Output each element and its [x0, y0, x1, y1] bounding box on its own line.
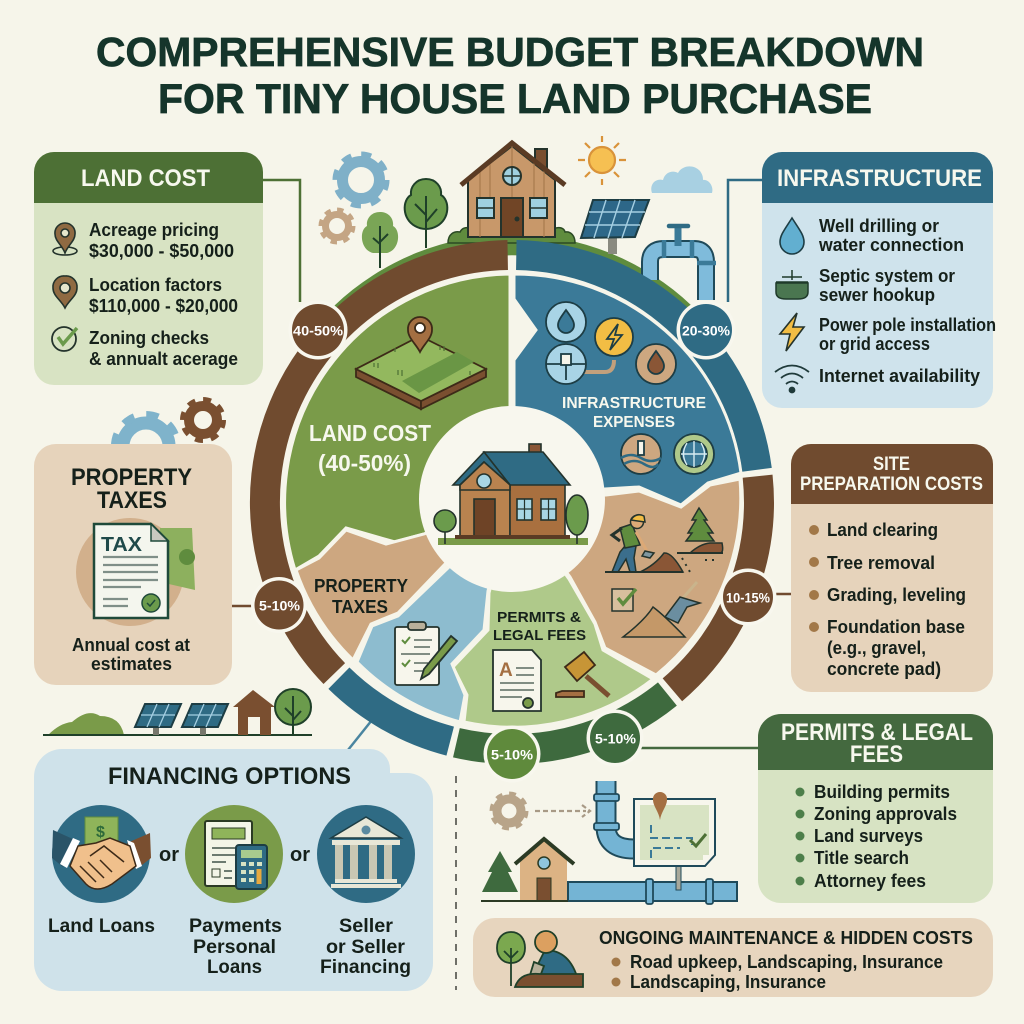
icon: check circle [52, 327, 77, 351]
heading [71, 464, 192, 514]
icon: tax document: TAX [101, 534, 143, 556]
text: seller financing: Seller [339, 916, 394, 937]
icons: infrastructure wedge [546, 302, 714, 474]
badge: 40-50% [288, 300, 348, 360]
icon: gravel pile [623, 607, 685, 637]
icon: gear [492, 794, 526, 828]
heading: INFRASTRUCTURE [777, 165, 982, 192]
text: well drilling [818, 215, 964, 255]
icon: gavel [556, 652, 609, 697]
list: maintenance items: Landscaping, Insurance [630, 971, 826, 992]
text: zoning checks: Zoning checks [89, 327, 209, 348]
text: acreage pricing [89, 219, 234, 261]
icon: tan gear [321, 210, 353, 242]
badge: 5-10% permits: 5-10% [595, 730, 637, 746]
text: location factors: Location factors [89, 274, 222, 295]
ring: site preparation [672, 476, 759, 690]
label: permits wedge: PERMITS & [497, 609, 581, 626]
text: septic: sewer hookup [819, 284, 935, 305]
icon: tree large [405, 179, 447, 248]
icon: pine tree [690, 543, 723, 553]
wedge: property taxes [296, 500, 512, 660]
icon: top scene [321, 136, 716, 326]
icon: water drop [780, 218, 804, 254]
heading: LAND COST [81, 165, 210, 192]
icon: permit document [493, 650, 541, 711]
label: land cost wedge: LAND COST [309, 420, 431, 446]
ring: land cost [265, 255, 508, 674]
icon: gardener with tree [497, 931, 583, 987]
icon: site map sign [676, 866, 681, 890]
label: property taxes wedge: TAXES [332, 597, 388, 617]
wedge: infrastructure [514, 274, 741, 505]
connector: site preparation [776, 593, 791, 595]
text: payments personal loans [189, 916, 282, 978]
icon: land loans handshake [52, 805, 151, 903]
text: payments personal loans: Personal [193, 937, 276, 958]
list: permit items: Building permits [814, 781, 950, 802]
icon: shovel [682, 582, 697, 599]
icon: land plot [356, 317, 486, 409]
label: permits wedge: LEGAL FEES [493, 627, 586, 644]
text: well drilling: water connection [818, 234, 964, 255]
icon: pin [53, 276, 77, 308]
text: location factors [89, 274, 238, 316]
text: annual cost [72, 634, 190, 674]
heading: PERMITS & LEGAL [781, 719, 973, 746]
icon: water pipe [650, 226, 716, 300]
icon: horizontal pipe [568, 882, 737, 901]
badge: 20-30% [676, 300, 736, 360]
icon: green hill [334, 234, 692, 326]
icon: solar panel [581, 200, 649, 254]
icon: pipe and site map illustration [481, 781, 737, 904]
list: site preparation items: Land clearing [827, 519, 938, 540]
arrow: dashed [535, 805, 590, 817]
panel: infrastructure [762, 152, 996, 408]
icon: checkbox [612, 589, 633, 611]
chart: inner wedges [285, 274, 741, 727]
heading: FEES [850, 741, 903, 768]
label: land cost wedge [309, 420, 431, 476]
badge: 20-30%: 20-30% [682, 322, 731, 338]
icon: bush around house [448, 228, 575, 243]
list: permit items: Zoning approvals [814, 803, 957, 824]
list: site preparation items [809, 519, 966, 679]
list: maintenance items: Road upkeep, Landscaping, Insurance [630, 951, 943, 972]
panel: ongoing maintenance [473, 918, 993, 997]
center hole [419, 406, 605, 592]
list: site preparation items: (e.g., gravel, [827, 637, 926, 658]
text: payments personal loans: Loans [207, 957, 262, 978]
panel: financing options [34, 749, 433, 991]
panel: land cost [34, 152, 263, 385]
label: permits wedge [493, 609, 586, 644]
icon: landscape strip [43, 689, 312, 735]
wedge: permits [453, 500, 653, 727]
list: site preparation items: Grading, leveling [827, 584, 966, 605]
wedge: site preparation [512, 479, 741, 675]
text: annual cost: Annual cost at [72, 634, 190, 655]
title: COMPREHENSIVE BUDGET BREAKDOWN [96, 29, 924, 75]
heading: ONGOING MAINTENANCE & HIDDEN COSTS [599, 928, 973, 948]
list: site preparation items: Tree removal [827, 552, 935, 573]
heading [800, 454, 983, 495]
icon: center house [434, 444, 588, 545]
badge: 10-15% [720, 568, 776, 626]
badge: 40-50%: 40-50% [293, 322, 344, 338]
heading: PREPARATION COSTS [800, 474, 983, 495]
text: land loans: Land Loans [48, 916, 155, 937]
text: well drilling: Well drilling or [819, 215, 939, 236]
icon: land loans handshake: $ [96, 824, 105, 841]
heading: FINANCING OPTIONS [108, 763, 351, 790]
text: power pole [819, 314, 996, 354]
ring: permits [456, 694, 667, 749]
icon: pipe [606, 781, 634, 849]
text: seller financing: Financing [320, 957, 411, 978]
list: maintenance items [612, 951, 943, 992]
text: internet: Internet availability [819, 365, 981, 386]
text: acreage pricing: $30,000 - $50,000 [89, 240, 234, 261]
heading: PROPERTY [71, 464, 192, 491]
icon: sun [578, 136, 626, 185]
text: seller financing: or Seller [326, 937, 406, 958]
ring: financing [339, 678, 450, 741]
text: power pole: or grid access [819, 333, 930, 354]
badge: 10-15%: 10-15% [726, 590, 770, 606]
text: location factors: $110,000 - $20,000 [89, 295, 238, 316]
icon: wifi [775, 366, 809, 392]
list: permit items: Land surveys [814, 825, 923, 846]
icon: blue gear behind property taxes [115, 415, 177, 477]
icon: blue gear [336, 155, 386, 205]
list: permit items: Attorney fees [814, 870, 926, 891]
connector: infrastructure [728, 180, 762, 302]
heading: SITE [873, 454, 910, 475]
text: power pole: Power pole installation [819, 314, 996, 335]
wedge: financing light blue [357, 500, 512, 722]
connector: financing [348, 720, 372, 750]
icon: tax document [76, 518, 195, 626]
panel: site preparation [791, 444, 993, 692]
text: acreage pricing: Acreage pricing [89, 219, 219, 240]
badge: 5-10% property: 5-10% [259, 598, 301, 614]
icon: payments document and calculator [185, 805, 283, 903]
text: zoning checks: & annualt acerage [89, 348, 238, 369]
label: infrastructure wedge [562, 395, 706, 431]
icon: clipboard and pen [395, 622, 457, 685]
icon: soil mound with worker [640, 553, 683, 572]
text: annual cost: estimates [91, 653, 172, 674]
connector: permits [640, 747, 760, 749]
panel: permits and legal fees [758, 714, 993, 903]
heading: TAXES [97, 487, 167, 514]
icon: pine tree [482, 851, 518, 892]
icon: cloud [651, 166, 712, 193]
icon: small house [520, 840, 567, 901]
text: septic: Septic system or [819, 265, 955, 286]
list: permit items [796, 781, 957, 891]
icon: bank [317, 805, 415, 903]
connector: land cost [263, 180, 300, 302]
list: permit items: Title search [814, 847, 909, 868]
title: FOR TINY HOUSE LAND PURCHASE [158, 75, 872, 122]
text: or: or [159, 844, 179, 866]
icon: septic tank [776, 270, 808, 299]
list: site preparation items: Foundation base [827, 616, 965, 637]
connector: property taxes [232, 605, 256, 607]
text: or: or [290, 844, 310, 866]
title [96, 29, 924, 122]
label: land cost wedge: (40-50%) [318, 450, 411, 476]
badge: 5-10% property [251, 577, 307, 633]
label: infrastructure wedge: EXPENSES [593, 414, 675, 431]
chart: donut ring [265, 255, 759, 749]
text: zoning checks [89, 327, 238, 369]
text: septic [819, 265, 955, 305]
heading [781, 719, 973, 768]
badge: 5-10% financing [484, 726, 540, 782]
ring: infrastructure [516, 255, 757, 470]
text: seller financing [320, 916, 411, 978]
label: property taxes wedge: PROPERTY [314, 576, 408, 596]
label: property taxes wedge [314, 576, 408, 617]
label: infrastructure wedge: INFRASTRUCTURE [562, 395, 706, 412]
icon: top house [461, 143, 565, 237]
panel: property taxes [34, 444, 232, 685]
badge: 5-10% financing: 5-10% [491, 746, 534, 762]
icons: site preparation wedge [605, 508, 723, 637]
text: payments personal loans: Payments [189, 916, 282, 937]
icon: lightning bolt [780, 313, 804, 351]
wedge: land cost [285, 274, 510, 570]
icon: tree small [362, 212, 398, 268]
icon: permit document: A [499, 660, 513, 681]
dashed divider [455, 776, 457, 990]
list: site preparation items: concrete pad) [827, 658, 941, 679]
badge: 5-10% permits [586, 710, 644, 766]
icon: brown gear [183, 400, 223, 440]
icon: pin with base [53, 223, 77, 255]
